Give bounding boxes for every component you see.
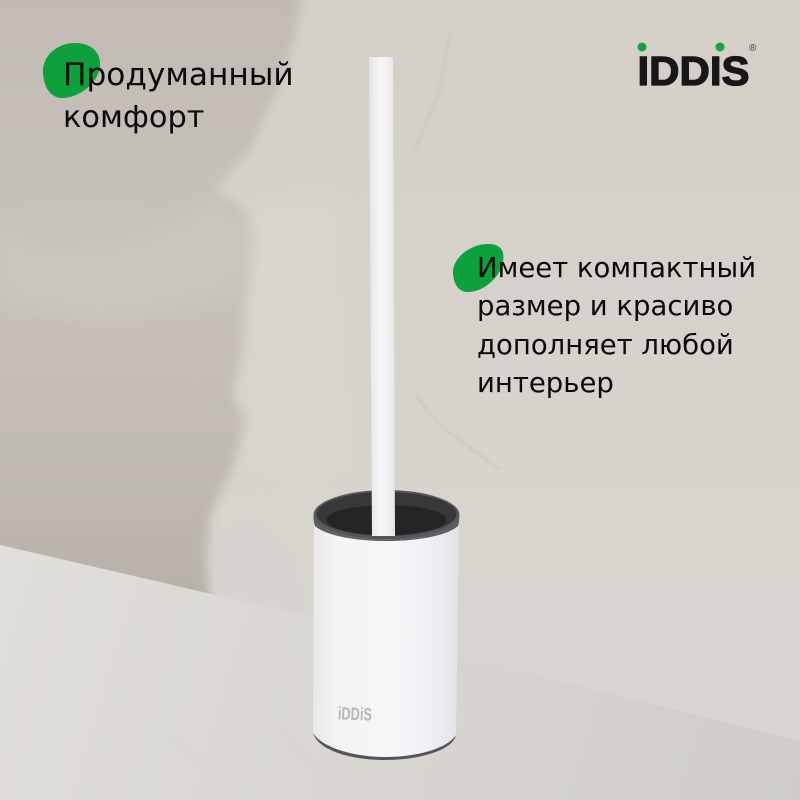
description text (477, 252, 756, 399)
heading (63, 57, 294, 134)
brush holder (313, 57, 460, 760)
holder base (313, 733, 456, 760)
holder interior (316, 492, 456, 536)
green blob: heading (43, 43, 100, 98)
logo dots (638, 42, 646, 52)
description text: Имеет компактный (477, 252, 756, 284)
logo registered mark: ® (749, 43, 757, 54)
description text: дополняет любой (477, 329, 734, 361)
heading: Продуманный (63, 57, 294, 93)
description text: интерьер (477, 367, 614, 399)
holder front rim (314, 515, 460, 541)
green blob: description (453, 244, 504, 292)
marble floor (0, 545, 800, 800)
holder body (313, 521, 459, 758)
holder logo: iDDiS (338, 703, 372, 725)
brush handle (369, 57, 395, 536)
logo (638, 42, 757, 92)
heading: комфорт (63, 100, 204, 134)
description text: размер и красиво (477, 290, 733, 322)
holder rim (314, 490, 460, 540)
